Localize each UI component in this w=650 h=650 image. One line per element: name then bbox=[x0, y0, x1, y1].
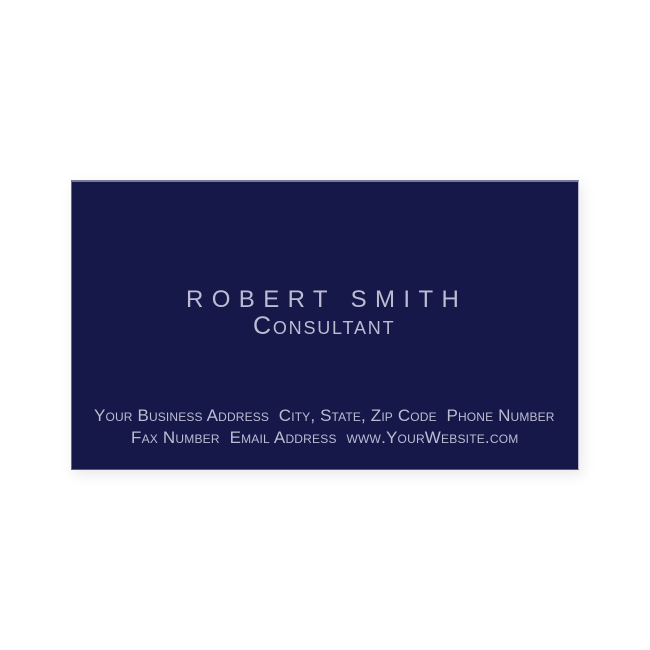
contact line 2: Fax Number Email Address www.YourWebsite.com bbox=[131, 428, 518, 447]
job title: Consultant bbox=[253, 312, 395, 340]
panel: business card bbox=[71, 180, 579, 470]
contact line 1: Your Business Address City, State, Zip Code Phone Number bbox=[94, 406, 555, 425]
name heading: ROBERT SMITH bbox=[186, 286, 467, 313]
